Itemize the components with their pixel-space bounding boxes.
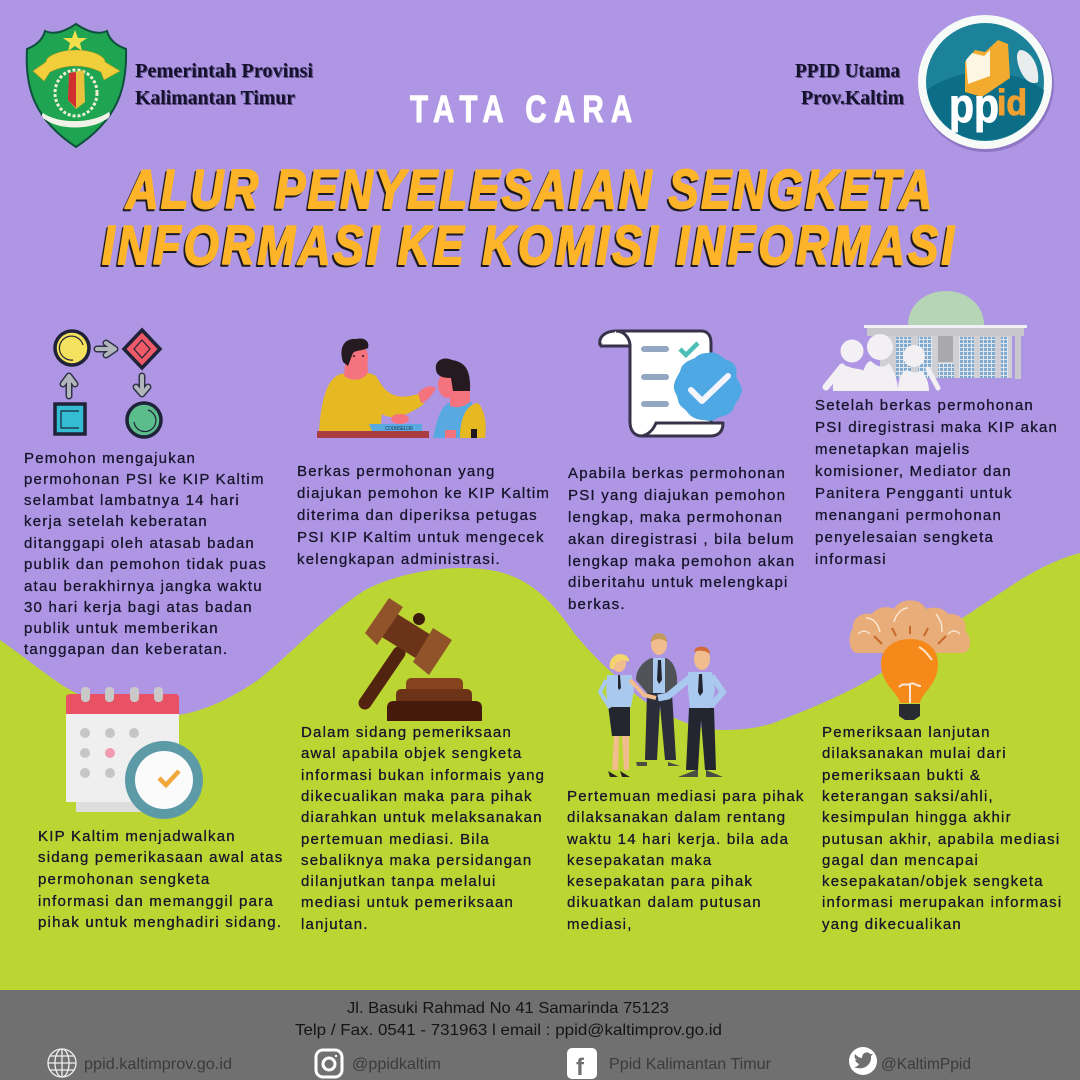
PPID logo: pp (949, 80, 999, 133)
main title: ALUR PENYELESAIAN SENGKETA (124, 158, 932, 220)
text block 3: lengkap maka pemohon akan (568, 553, 795, 570)
website: ppid.kaltimprov.go.id (84, 1056, 232, 1073)
text block 1: publik dan pemohon tidak puas (24, 556, 267, 573)
text block 8: kesepakatan/objek sengketa (822, 873, 1044, 890)
footer band (0, 990, 1080, 1080)
text block 4: menetapkan majelis (815, 441, 970, 458)
text block 4: penyelesaian sengketa (815, 529, 994, 546)
text block 6: lanjutan. (301, 916, 369, 933)
text block 8: gagal dan mencapai (822, 852, 979, 869)
text block 6: sebaliknya maka persidangan (301, 852, 532, 869)
icon: counselor and student (317, 338, 486, 438)
shield logo: Pemerintah Provinsi Kalimantan Timur (27, 24, 126, 147)
text block 2: PSI KIP Kaltim untuk mengecek (297, 529, 545, 546)
text block 5: sidang pemerikasaan awal atas (38, 849, 284, 866)
icon: verified document scroll (600, 331, 742, 436)
text block 8: keterangan saksi/ahli, (822, 788, 994, 805)
text block 5: pihak untuk menghadiri sidang. (38, 914, 282, 931)
text block 1: permohonan PSI ke KIP Kaltim (24, 471, 265, 488)
text block 6: diarahkan untuk melaksanakan (301, 809, 543, 826)
text block 7: kesepakatan para pihak (567, 873, 753, 890)
text block 6: dikecualikan maka para pihak (301, 788, 533, 805)
facebook name: Ppid Kalimantan Timur (609, 1056, 772, 1073)
text block 6: mediasi untuk pemeriksaan (301, 894, 514, 911)
text block 1: ditanggapi oleh atasab badan (24, 535, 255, 552)
text block 6: awal apabila objek sengketa (301, 745, 522, 762)
text block 3: Apabila berkas permohonan (568, 465, 786, 482)
text block 5: informasi dan memanggil para (38, 893, 274, 910)
icon: flow diagram (55, 330, 161, 437)
PPID logo: id (997, 82, 1027, 123)
text block 1: atau berakhirnya jangka waktu (24, 578, 263, 595)
text block 8: informasi merupakan informasi (822, 894, 1062, 911)
text block 8: pemeriksaan bukti & (822, 767, 981, 784)
text block 2: Berkas permohonan yang (297, 463, 496, 480)
footer address: Telp / Fax. 0541 - 731963 l email : ppid@kaltimprov.go.id (295, 1022, 722, 1039)
text block 2: diajukan pemohon ke KIP Kaltim (297, 485, 550, 502)
text block 8: kesimpulan hingga akhir (822, 809, 1012, 826)
text block 6: dilanjutkan tanpa melalui (301, 873, 497, 890)
text block 3: PSI yang diajukan pemohon (568, 487, 786, 504)
text block 4: Setelah berkas permohonan (815, 397, 1034, 414)
text block 4: menangani permohonan (815, 507, 1002, 524)
text block 7: dilaksanakan dalam rentang (567, 809, 786, 826)
instagram handle: @ppidkaltim (352, 1056, 441, 1073)
text block 8: yang dikecualikan (822, 916, 962, 933)
icon: globe (48, 1049, 76, 1077)
text block 1: 30 hari kerja bagi atas badan (24, 599, 253, 616)
text block 2: diterima dan diperiksa petugas (297, 507, 538, 524)
icon: building and people (826, 291, 1027, 391)
text block 4: Panitera Pengganti untuk (815, 485, 1013, 502)
icon: lightbulb and brain (850, 600, 970, 720)
text block 3: diberitahu untuk melengkapi (568, 574, 789, 591)
icon: instagram (316, 1050, 342, 1077)
main title (102, 158, 955, 276)
text block 7: dikuatkan dalam putusan (567, 894, 762, 911)
header text left (135, 60, 313, 109)
text block 7: kesepakatan maka (567, 852, 712, 869)
text block 3: berkas. (568, 596, 626, 613)
footer address (295, 1000, 722, 1039)
text block 4: komisioner, Mediator dan (815, 463, 1012, 480)
twitter handle: @KaltimPpid (881, 1056, 971, 1073)
text block 4: informasi (815, 551, 887, 568)
header text right (795, 60, 904, 109)
icon: twitter (849, 1047, 877, 1075)
text block 1: Pemohon mengajukan (24, 450, 196, 467)
icon: calendar and clock (66, 687, 203, 819)
icon: counselor and student: COUNSELOR (385, 426, 413, 432)
header text left: Kalimantan Timur (135, 87, 295, 109)
text block 8: dilaksanakan mulai dari (822, 745, 1007, 762)
text block 6: informasi bukan informais yang (301, 767, 545, 784)
text block 7: mediasi, (567, 916, 633, 933)
text block 6: Dalam sidang pemeriksaan (301, 724, 512, 741)
text block 4: PSI diregistrasi maka KIP akan (815, 419, 1058, 436)
text block 5: KIP Kaltim menjadwalkan (38, 828, 236, 845)
text block 1: publik untuk memberikan (24, 620, 219, 637)
subtitle: TATA CARA: TATA CARA (410, 89, 632, 131)
footer address: Jl. Basuki Rahmad No 41 Samarinda 75123 (347, 1000, 669, 1017)
text block 3: akan diregistrasi , bila belum (568, 531, 795, 548)
text block 7: waktu 14 hari kerja. bila ada (566, 831, 789, 848)
main title: INFORMASI KE KOMISI INFORMASI (102, 214, 955, 276)
text block 5: permohonan sengketa (38, 871, 210, 888)
header text right: PPID Utama (795, 60, 900, 82)
text block 1: kerja setelah keberatan (24, 513, 208, 530)
icon: gavel (365, 598, 482, 721)
text block 2: kelengkapan administrasi. (297, 551, 501, 568)
icon: three people shaking hands (600, 633, 723, 777)
text block 1: tanggapan dan keberatan. (24, 641, 228, 658)
text block 6: pertemuan mediasi. Bila (301, 831, 490, 848)
icon: facebook (567, 1048, 597, 1080)
header text left: Pemerintah Provinsi (135, 60, 313, 82)
text block 3: lengkap, maka permohonan (568, 509, 783, 526)
header text right: Prov.Kaltim (801, 87, 904, 109)
text block 7: Pertemuan mediasi para pihak (567, 788, 805, 805)
green wave background (0, 553, 1080, 995)
text block 8: Pemeriksaan lanjutan (822, 724, 991, 741)
text block 1: selambat lambatnya 14 hari (24, 492, 240, 509)
PPID logo (918, 15, 1054, 152)
text block 8: putusan akhir, apabila mediasi (822, 831, 1060, 848)
